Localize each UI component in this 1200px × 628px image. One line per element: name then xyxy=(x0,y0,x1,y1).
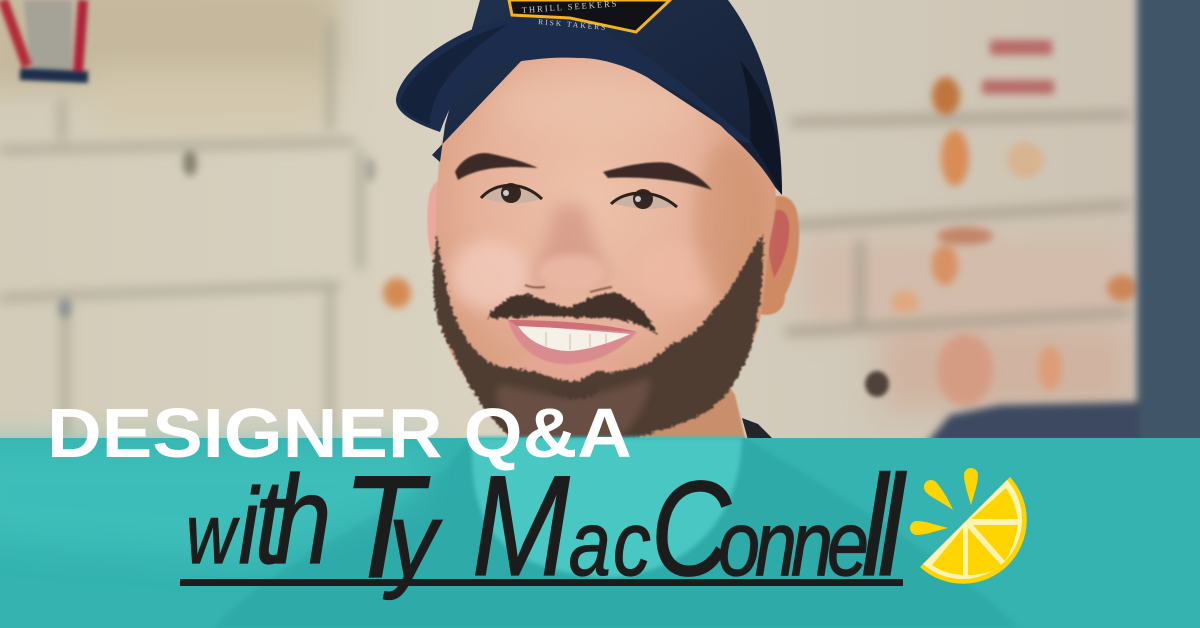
cap crown xyxy=(432,0,782,195)
right eye xyxy=(611,189,677,209)
eyebrows xyxy=(455,153,712,190)
icon: lemon slice xyxy=(910,468,1027,584)
teal banner xyxy=(0,438,1200,628)
photo: portrait background xyxy=(0,0,1200,450)
moustache xyxy=(487,293,657,335)
mouth xyxy=(508,320,637,364)
word: with: w xyxy=(186,488,240,582)
red tool top left xyxy=(3,0,88,77)
nostrils xyxy=(525,285,612,292)
word: Ty: T xyxy=(342,446,431,609)
cap badge xyxy=(509,0,670,32)
word: with: h xyxy=(275,451,332,590)
lemon pith xyxy=(923,480,1022,579)
title: designer q&a: DESIGNER Q&A xyxy=(47,394,632,472)
cap badge: RISK TAKERS xyxy=(538,17,608,32)
word: with: t xyxy=(255,456,286,589)
juice drops xyxy=(910,468,978,535)
beard xyxy=(433,233,763,442)
dark pillar right xyxy=(925,0,1200,450)
cap back mesh xyxy=(740,60,782,195)
cap visor xyxy=(396,16,752,143)
neck and collar xyxy=(631,387,772,438)
word: MacConnell: o xyxy=(718,492,760,595)
lemon rind xyxy=(920,477,1027,584)
word: MacConnell: n xyxy=(755,492,797,595)
face xyxy=(436,58,776,382)
name underline xyxy=(180,579,903,586)
left eye xyxy=(481,183,542,203)
word: MacConnell: C xyxy=(651,454,731,605)
word: MacConnell: M xyxy=(472,446,570,606)
word: Ty: y xyxy=(383,479,443,600)
word: MacConnell: l xyxy=(878,446,907,606)
word: MacConnell: e xyxy=(827,492,869,595)
brick wall backdrop xyxy=(0,0,1200,438)
lemon segments xyxy=(932,488,1018,575)
ears xyxy=(427,180,799,315)
word: MacConnell: c xyxy=(613,492,651,595)
baseball cap xyxy=(396,0,782,195)
word: with: i xyxy=(238,466,261,586)
shirt silhouette xyxy=(0,438,1020,628)
word: MacConnell: n xyxy=(791,492,833,595)
facial shading xyxy=(450,75,766,386)
brick stains xyxy=(59,40,1137,406)
word: MacConnell: l xyxy=(862,446,890,606)
script name line xyxy=(186,446,907,609)
word: MacConnell: a xyxy=(569,492,611,595)
